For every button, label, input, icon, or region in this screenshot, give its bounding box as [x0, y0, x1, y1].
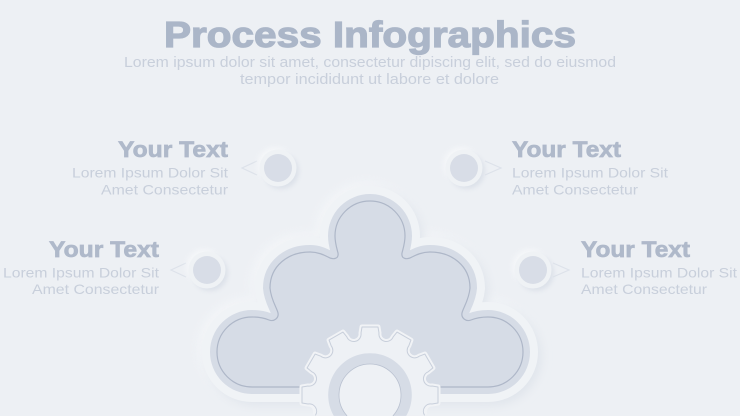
text block: top left: Amet Consectetur	[101, 182, 228, 198]
panel: lower right label	[512, 237, 737, 297]
text block: lower left: Lorem Ipsum Dolor Sit	[3, 264, 159, 280]
text block: top left: Lorem Ipsum Dolor Sit	[72, 164, 228, 180]
panel: top right label	[443, 137, 668, 198]
heading: lower left: Your Text	[49, 237, 160, 262]
title: Process Infographics	[164, 14, 576, 55]
icon: top left node	[257, 147, 299, 189]
arrow: top left	[242, 161, 257, 175]
text block: top right: Lorem Ipsum Dolor Sit	[512, 164, 668, 180]
panel: top left label	[72, 137, 299, 198]
icon: gear	[302, 327, 438, 416]
text block: lower right: Lorem Ipsum Dolor Sit	[581, 264, 737, 280]
heading: lower right: Your Text	[581, 237, 691, 262]
text block: top left	[72, 164, 228, 198]
text block: top right	[512, 164, 668, 198]
text block: top right: Amet Consectetur	[512, 182, 638, 198]
text block: lower left: Amet Consectetur	[32, 281, 159, 297]
text block: lower left	[3, 264, 159, 297]
heading: top right: Your Text	[512, 137, 622, 162]
text block: lower right	[581, 264, 737, 297]
icon: top right node	[443, 147, 485, 189]
subtitle: Lorem ipsum dolor sit amet, consectetur dipiscing elit, sed do eiusmod	[124, 55, 616, 71]
arrow: lower right	[553, 263, 569, 277]
arrow: top right	[485, 161, 501, 175]
heading: top left: Your Text	[118, 137, 229, 162]
icon: lower left node	[186, 249, 228, 291]
icon: cloud	[213, 197, 527, 391]
panel: lower left label	[3, 237, 228, 297]
arrow: lower left	[171, 263, 186, 277]
icon: lower right node	[512, 249, 554, 291]
subtitle: tempor incididunt ut labore et dolore	[240, 72, 499, 88]
text block: lower right: Amet Consectetur	[581, 281, 707, 297]
subtitle	[124, 55, 616, 88]
